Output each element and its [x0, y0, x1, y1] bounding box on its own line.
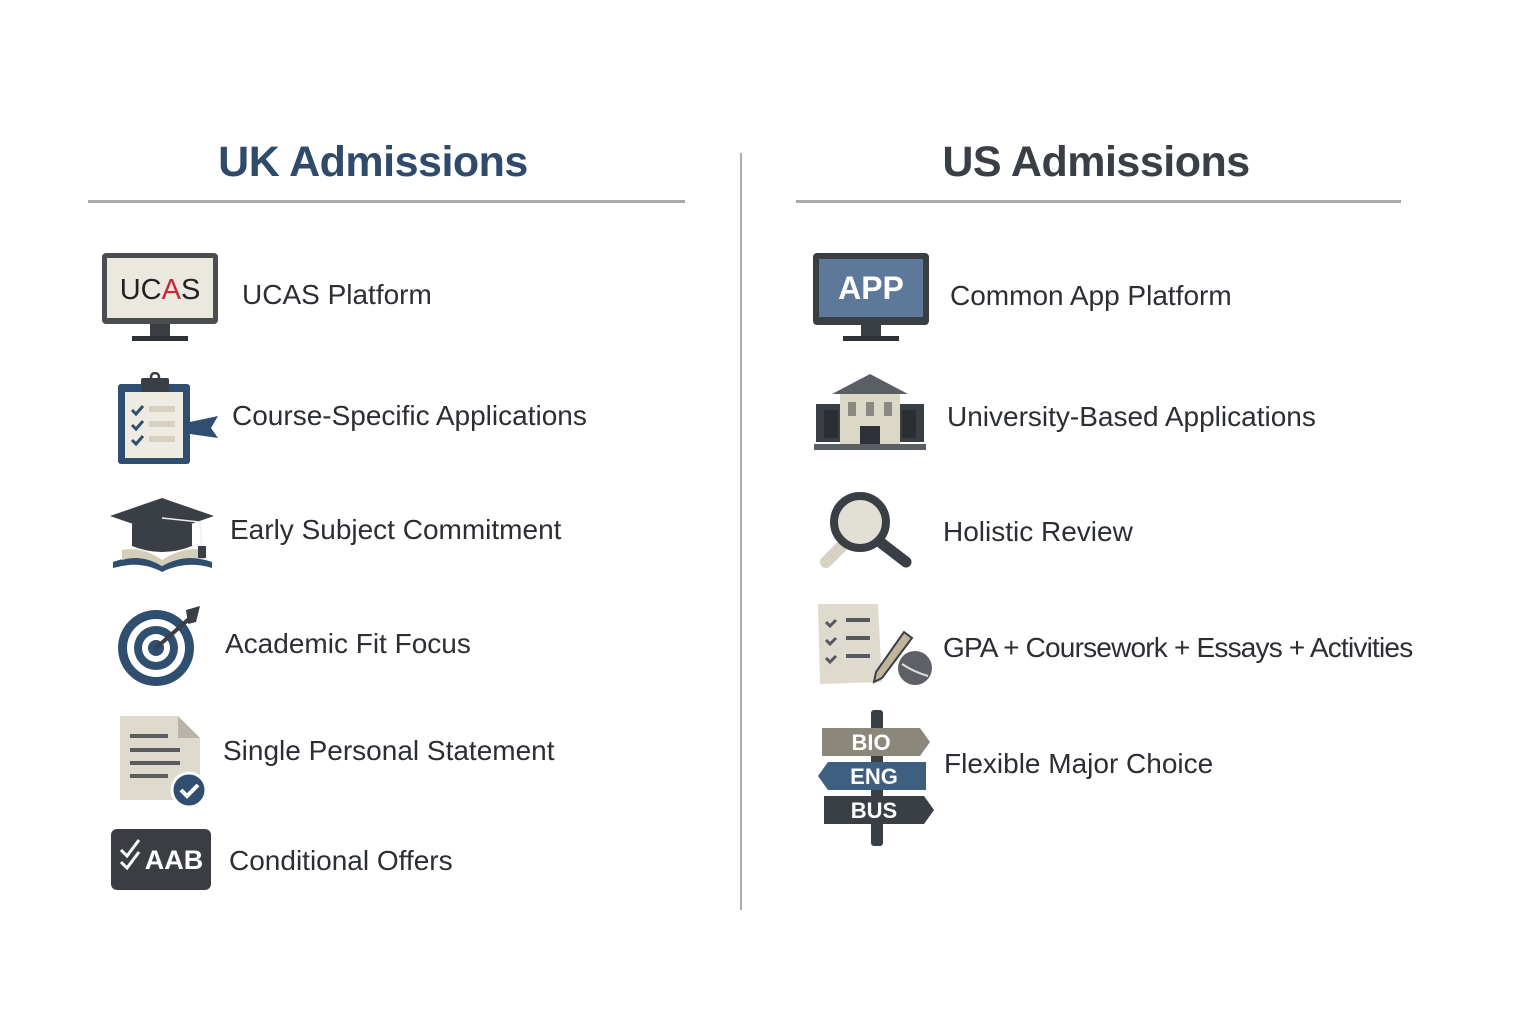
text: GPA + Coursework + Essays + Activities: GPA + Coursework + Essays + Activities	[943, 632, 1412, 663]
icon: signpost BIO ENG BUS: BIO	[851, 730, 891, 755]
text: Academic Fit Focus: Academic Fit Focus	[225, 628, 471, 659]
icon: target	[118, 606, 200, 686]
text: Conditional Offers: Conditional Offers	[229, 845, 453, 876]
icon: signpost BIO ENG BUS: BUS	[851, 798, 897, 823]
icon: AAB badge	[111, 829, 211, 890]
text: Common App Platform: Common App Platform	[950, 280, 1232, 311]
icon: APP monitor	[813, 253, 929, 341]
text: Course-Specific Applications: Course-Specific Applications	[232, 400, 587, 431]
text: Holistic Review: Holistic Review	[943, 516, 1133, 547]
text: Early Subject Commitment: Early Subject Commitment	[230, 514, 561, 545]
icon: AAB badge: AAB	[145, 845, 203, 875]
text: Single Personal Statement: Single Personal Statement	[223, 735, 555, 766]
icon: APP monitor: APP	[838, 270, 904, 306]
icon: signpost BIO ENG BUS	[818, 710, 934, 846]
text: UCAS Platform: UCAS Platform	[242, 279, 432, 310]
icon: clipboard	[118, 372, 218, 464]
icon: university building	[814, 374, 926, 450]
icon: checklist pencil ball	[818, 604, 932, 685]
icon: UCAS monitor	[102, 253, 218, 341]
title: UK Admissions: UK Admissions	[218, 138, 528, 186]
title: US Admissions: US Admissions	[942, 138, 1250, 186]
text: University-Based Applications: University-Based Applications	[947, 401, 1316, 432]
icon: graduation cap	[110, 498, 214, 572]
text: Flexible Major Choice: Flexible Major Choice	[944, 748, 1213, 779]
icon: magnifying glass	[820, 492, 912, 568]
icon: signpost BIO ENG BUS: ENG	[850, 764, 898, 789]
icon: UCAS monitor: UCAS	[120, 274, 200, 306]
icon: document with check	[120, 716, 204, 806]
